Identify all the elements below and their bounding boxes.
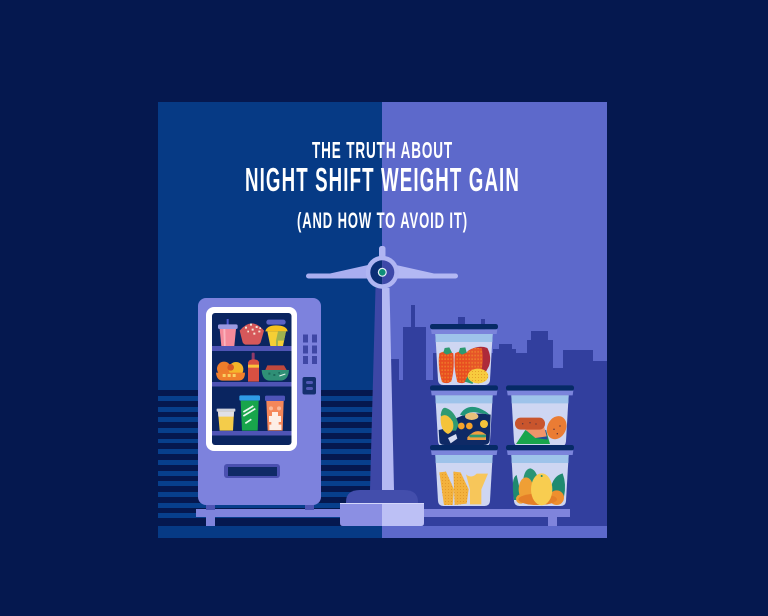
ketchup bottle [248, 353, 259, 382]
muffin [240, 323, 264, 345]
card reader [302, 377, 316, 394]
title [245, 137, 520, 233]
orange bottle [265, 396, 285, 431]
food containers [430, 324, 574, 506]
container: strawberries and lemon [430, 324, 498, 385]
green can [239, 395, 260, 431]
vending window [206, 307, 297, 451]
juice cup [217, 409, 235, 431]
container: crackers [430, 445, 498, 506]
pickup slot [224, 464, 280, 478]
vending machine [198, 298, 321, 510]
balance scale [306, 246, 458, 526]
container: sweet potato and greens [506, 385, 574, 446]
title: (AND HOW TO AVOID IT) [297, 208, 468, 233]
shelf [196, 509, 570, 526]
soda cup [218, 319, 238, 346]
panel: day side [382, 102, 607, 538]
title: NIGHT SHIFT WEIGHT GAIN [245, 161, 520, 198]
container: orange fruits [506, 445, 574, 506]
title: THE TRUTH ABOUT [312, 137, 453, 163]
panel: night side [158, 102, 382, 538]
container: mixed vegetables [430, 385, 498, 446]
fruit basket [216, 362, 245, 381]
green dish [262, 365, 289, 381]
city skyline [382, 305, 607, 526]
vending snacks [216, 319, 289, 431]
keypad [303, 334, 317, 364]
yellow drink [265, 320, 288, 346]
